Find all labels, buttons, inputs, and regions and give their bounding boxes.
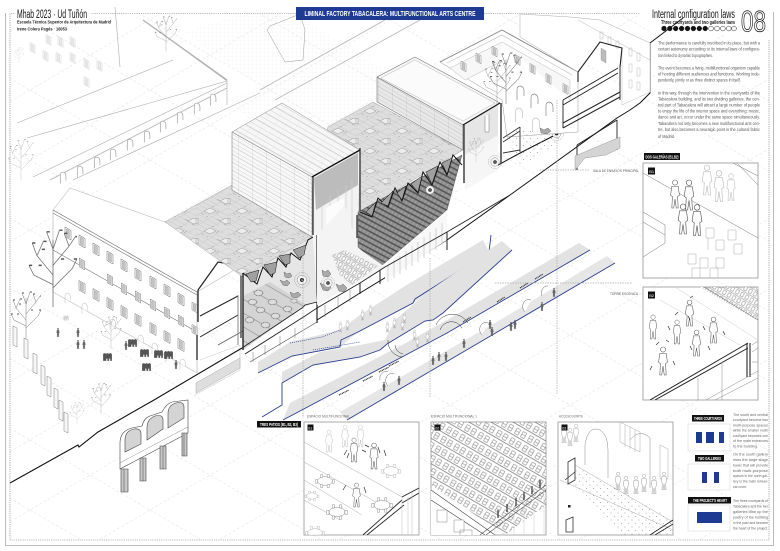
text: two galleries: both multi-purpose	[733, 468, 768, 473]
text: two galleries: On the south gallery	[733, 452, 768, 456]
text: two galleries: sal room.	[733, 484, 747, 489]
introduction text: dance and art, occur under the same space simultaneously.	[658, 114, 760, 120]
gallery strip B	[262, 241, 512, 417]
tag: dos galerias	[644, 152, 680, 160]
text: two galleries: tower that will provide	[733, 462, 768, 468]
introduction text: Tabacalera building, and its two dividing galleries, the cen-	[658, 96, 761, 102]
text: the project's heart: in the past and become	[733, 520, 768, 525]
text: the project's heart: poetry of the building	[733, 514, 768, 520]
text: two galleries	[733, 452, 769, 489]
introduction text: In this way, through the intervention in the courtyards of the	[658, 90, 761, 96]
plaza column row	[13, 326, 68, 433]
introduction text: to enjoy the life of the interior space and everything: music,	[658, 108, 760, 114]
panel: acceso norte	[558, 422, 673, 535]
progress dots	[662, 26, 736, 31]
introduction text: of hosting different audiences and functions. Working inde-	[658, 72, 761, 76]
gallery strip C	[283, 243, 590, 420]
panel tag 02	[434, 424, 440, 430]
north courtyard building	[440, 30, 578, 167]
north tower: opaque volume	[377, 57, 501, 190]
introduction text: of Madrid.	[658, 134, 675, 139]
basement section band	[242, 195, 510, 362]
panel tag B2	[648, 292, 655, 298]
introduction text: certain autonomy according to its internal laws of configura-	[658, 46, 761, 52]
panel tag 01	[308, 424, 314, 430]
courtyard central roof canopy	[312, 102, 463, 212]
panel: espacio multifuncional	[304, 422, 419, 540]
panel: dos galerias B2	[643, 287, 758, 400]
panel tag B1: B1	[649, 169, 655, 174]
panel tag B2: B2	[649, 293, 655, 298]
gallery strip D	[340, 256, 615, 420]
label: espacio multifuncional: ESPACIO MULTIFUNCIONAL	[307, 414, 350, 418]
west building: roof and facade	[53, 188, 241, 373]
text: three courtyards: courtyard become two	[733, 417, 768, 422]
text: the project's heart: the heart of the project.	[733, 526, 768, 530]
panel tag 02: 02	[435, 426, 439, 430]
urban context: plaza and street lines	[8, 8, 445, 180]
label: espacio multifuncional 1: ESPACIO MULTIFUNCIONAL 1	[431, 414, 477, 418]
panel tag 03	[562, 424, 568, 430]
text: the project's heart: galleries dine up the	[733, 509, 768, 514]
header: studio and author: Escuela Técnica Superior de Arquitectura de Madrid	[17, 20, 111, 26]
text: three courtyards: while the smaller north	[733, 428, 768, 432]
panel tag B1	[648, 168, 655, 174]
diagram: the project's heart: THE PROJECT'S HEART	[693, 498, 727, 503]
tag: dos galerias: DOS GALERÍAS (B1,B2)	[646, 152, 679, 160]
east section cut	[563, 42, 622, 170]
diagram: two galleries	[688, 455, 730, 490]
introduction text: The performance is carefully inscribed in its place, but with a	[658, 40, 761, 46]
hanging canopy zigzag north	[360, 155, 462, 217]
main ground section line	[10, 43, 650, 483]
label: acceso norte: ACCESO NORTE	[559, 414, 583, 418]
acoustic arc marks	[388, 314, 468, 357]
introduction text: tral part of Tabacalera will attract a large number of people	[658, 102, 761, 108]
section heading: internal configuration laws	[650, 5, 737, 43]
diagram: two galleries: TWO GALLERIES	[698, 456, 721, 461]
label: sala de ensayos: SALA DE ENSAYOS PRINCIPAL	[593, 169, 639, 173]
text: the project's heart: Tabacalera and the two	[733, 504, 768, 508]
panel: espacio multifuncional 1	[431, 422, 546, 536]
text: the project's heart	[733, 498, 769, 530]
introduction text: The event becomes a living, multifunctional organism capable	[658, 66, 761, 70]
panel tag 01: 01	[308, 426, 312, 430]
multifunctional hall section	[243, 237, 317, 350]
introduction text: tion linked to dynamic topographies.	[658, 53, 713, 58]
text: three courtyards: courtyard becomes one	[733, 433, 768, 438]
section heading: internal configuration laws: Three courtyards and two galleries laws	[661, 20, 735, 26]
title banner: LIMINAL FACTORY TABACALERA: MULTIFUNCTIONAL ARTS CENTRE	[304, 9, 476, 18]
diagram: the project's heart	[688, 497, 731, 531]
courtyard south roof canopy	[165, 185, 312, 277]
text: two galleries: rises the large stage	[733, 457, 768, 462]
text: three courtyards	[733, 412, 768, 448]
introduction text	[658, 40, 761, 139]
label: torre escenica: TORRE ESCÉNICA	[610, 291, 638, 296]
plaza trees and people	[11, 230, 177, 425]
text: three courtyards: The south and central	[733, 412, 768, 417]
text: the project's heart: The three courtyards of	[733, 498, 769, 503]
text: three courtyards: to the building.	[733, 444, 758, 448]
diagram: three courtyards: THREE COURTYARDS	[694, 416, 722, 421]
aqueduct fragment	[120, 400, 188, 492]
text: two galleries: spaces in the north gal-	[733, 473, 769, 478]
auditorium seating section	[317, 155, 462, 305]
introduction text: pendently, jointly or as three distinct spaces in itself.	[658, 78, 741, 82]
panel tag 03: 03	[562, 426, 566, 430]
text: two galleries: lery is the main rehear-	[733, 478, 769, 484]
urban context: north-west building	[17, 7, 260, 183]
title banner	[296, 7, 484, 20]
north-east building roof and facades	[520, 14, 650, 105]
leader lines	[303, 100, 632, 418]
section number 08: 08	[741, 6, 766, 38]
text: three courtyards: multi-purpose spaces	[733, 422, 768, 428]
stage tower: glass volume	[232, 103, 360, 323]
tag: tres patios	[257, 421, 301, 428]
text: three courtyards: of the main entrances	[733, 438, 768, 443]
header: studio and author	[15, 6, 111, 33]
header: studio and author: Irene Colera Pagés · 16053	[17, 26, 67, 32]
panel: dos galerias B1	[643, 163, 758, 278]
introduction text: Tabacalera not only becomes a new multifunctional arts cen-	[658, 121, 761, 126]
spotlight markers	[295, 126, 564, 290]
gallery strip A	[258, 235, 491, 373]
tag: tres patios: TRES PATIOS (B1, B2, B3)	[260, 422, 298, 427]
west section cut	[195, 262, 250, 395]
diagram: three courtyards	[688, 415, 730, 451]
hanging canopy zigzag south	[243, 237, 313, 284]
introduction text: tre, but also becomes a neuralgic point in the cultural fabric	[658, 127, 761, 132]
header: studio and author: Mhab 2023 · Ud Tuñón	[17, 9, 87, 21]
